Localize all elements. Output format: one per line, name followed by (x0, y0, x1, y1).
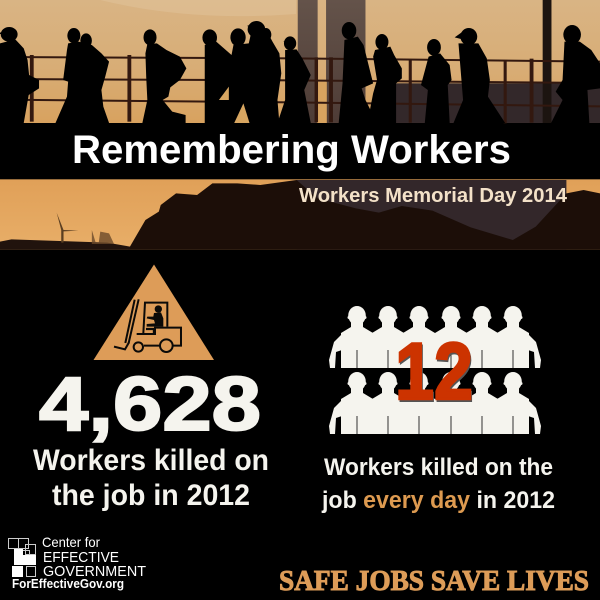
logo: Center for Effective Government: GOVERNMENT (43, 563, 146, 580)
text: workers killed every day (321, 454, 555, 514)
logo: Center for Effective Government: Center for (42, 534, 100, 550)
logo: Center for Effective Government (8, 534, 146, 591)
text: workers killed on the job in 2012 (33, 444, 269, 512)
slogan: SAFE JOBS SAVE LIVES (279, 565, 589, 597)
subtitle: Workers Memorial Day 2014 (299, 185, 568, 207)
photo: dusk landscape with mounds and wind turbine (0, 179, 600, 250)
icon: forklift warning triangle (94, 264, 214, 360)
logo: Center for Effective Government: ForEffectiveGov.org (12, 577, 124, 591)
logo: Center for Effective Government: EFFECTIVE (43, 549, 119, 566)
text: workers killed every day: Workers killed on the (324, 454, 553, 481)
text: workers killed every day: job every day in 2012 (321, 487, 555, 514)
big number: 12: 12 (396, 329, 474, 419)
text: workers killed on the job in 2012: Workers killed on (33, 444, 269, 477)
photo: workers silhouettes walking at sunset (0, 0, 600, 123)
text: workers killed on the job in 2012: the job in 2012 (52, 479, 250, 512)
big number: 12: 12 (395, 327, 473, 417)
big number: 4,628: 4,628 (39, 362, 261, 447)
title: Remembering Workers (72, 128, 511, 172)
icon: two rows of worker silhouettes (329, 306, 541, 434)
